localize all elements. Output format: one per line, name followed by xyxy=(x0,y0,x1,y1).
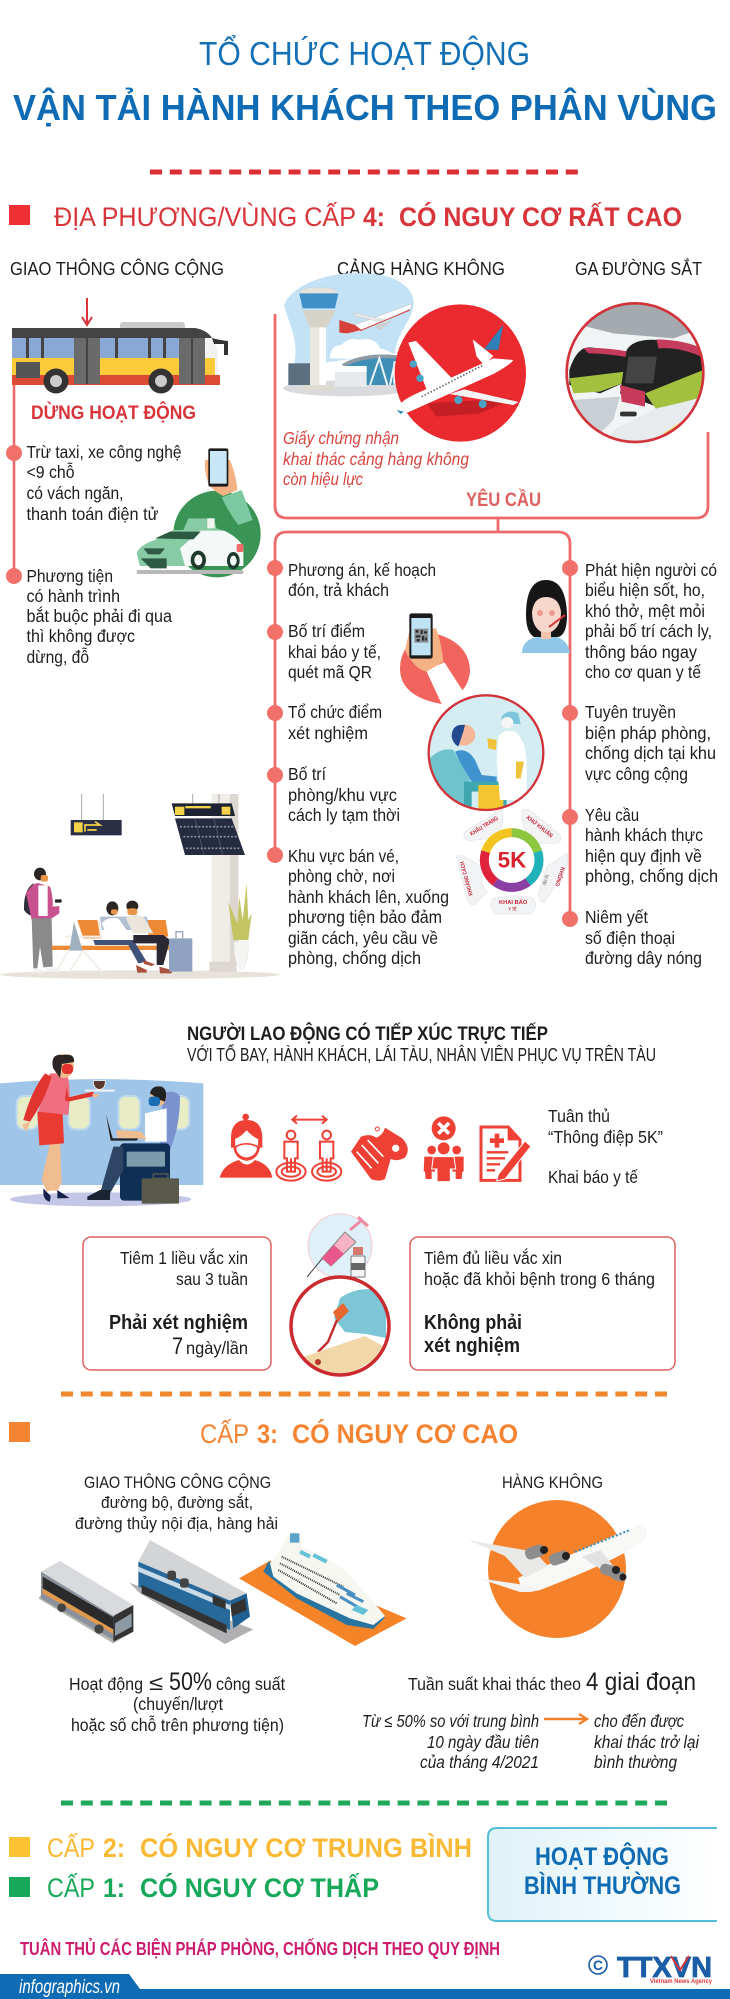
heading: level 2: CÓ NGUY CƠ TRUNG BÌNH xyxy=(140,1832,472,1863)
text: 5K compliance xyxy=(548,1106,663,1187)
text: flight frequency: của tháng 4/2021 xyxy=(420,1752,539,1772)
text: right requirements: Tuyên truyền xyxy=(585,702,676,722)
icon: avoid gatherings xyxy=(424,1116,464,1182)
icon: mask xyxy=(220,1114,272,1178)
text: flight frequency: cho đến được xyxy=(594,1711,684,1731)
timeline: requirements xyxy=(267,518,578,927)
text: left requirements xyxy=(288,560,449,968)
text: exceptions: thanh toán điện tử xyxy=(26,504,159,524)
text: vehicles passing through: bắt buộc phải đi qua xyxy=(26,605,172,626)
text: left requirements: xét nghiệm xyxy=(288,723,368,743)
heading: level 1: 1: xyxy=(103,1873,125,1903)
text: capacity limit: 50% xyxy=(169,1668,212,1696)
panel: partially vaccinated: 7 xyxy=(172,1333,183,1360)
heading: level 2 xyxy=(9,1832,472,1863)
text: left requirements: cách ly tạm thời xyxy=(288,805,400,825)
text: 5K compliance: Khai báo y tế xyxy=(548,1167,638,1187)
text: left requirements: Bố trí điểm xyxy=(288,621,365,641)
logo: TTXVN: C xyxy=(593,1957,603,1973)
heading: level 1: CÓ NGUY CƠ THẤP xyxy=(140,1872,379,1903)
text: airport certificate: Giấy chứng nhận xyxy=(283,428,399,448)
text: left requirements: Bố trí xyxy=(288,764,326,784)
heading: direct-contact workers: NGƯỜI LAO ĐỘNG CÓ TIẾP XÚC TRỰC TIẾP xyxy=(187,1023,548,1045)
panel: partially vaccinated: Phải xét nghiệm xyxy=(109,1312,248,1334)
text: left requirements: đón, trả khách xyxy=(288,580,389,600)
text: aviation level 3: HÀNG KHÔNG xyxy=(502,1473,603,1492)
column headings xyxy=(10,258,702,279)
icon: 5K message: 5K xyxy=(498,848,526,873)
column headings: CẢNG HÀNG KHÔNG xyxy=(337,258,505,279)
icon: metro train circle xyxy=(563,302,707,445)
text: left requirements: phương tiện bảo đảm xyxy=(288,907,442,927)
text: flight frequency: 10 ngày đầu tiên xyxy=(427,1732,539,1752)
text: vehicles passing through: dừng, đỗ xyxy=(26,646,89,667)
text: flight frequency xyxy=(362,1668,700,1772)
text: vehicles passing through: có hành trình xyxy=(26,586,120,606)
heading: level 1 xyxy=(9,1872,379,1903)
text: flight frequency: bình thường xyxy=(594,1752,677,1772)
text: left requirements: Khu vực bán vé, xyxy=(288,846,399,866)
text: 5K compliance: Tuân thủ xyxy=(548,1106,610,1126)
heading: direct-contact workers xyxy=(187,1023,656,1065)
callout: normal operation: BÌNH THƯỜNG xyxy=(524,1870,681,1900)
icon: rapid test xyxy=(291,1277,390,1380)
panel: partially vaccinated: sau 3 tuần xyxy=(176,1269,248,1289)
text: public transport level 3: GIAO THÔNG CÔNG CỘNG xyxy=(84,1473,271,1492)
text: flight frequency: 4 giai đoạn xyxy=(586,1668,696,1696)
icon: 5K message: KHẨU TRANG xyxy=(469,815,500,838)
callout: normal operation: HOẠT ĐỘNG xyxy=(535,1841,669,1871)
icon: keep distance xyxy=(276,1116,341,1181)
column headings: GA ĐƯỜNG SẮT xyxy=(575,258,702,279)
heading: requirements: YÊU CẦU xyxy=(466,489,541,511)
icon: bus xyxy=(12,322,228,394)
icon: covid test circle xyxy=(428,695,543,813)
text: vehicles passing through xyxy=(26,566,172,667)
heading: level 4 xyxy=(9,201,682,232)
icon: 5K message: Y TẾ xyxy=(508,906,517,912)
bracket: airport and rail requirements xyxy=(275,314,708,518)
icon: vaccine syringe xyxy=(307,1214,372,1278)
text: left requirements: Phương án, kế hoạch xyxy=(288,560,436,580)
icon: 5K message: KHỬ KHUẨN xyxy=(525,814,554,839)
panel: fully vaccinated xyxy=(410,1237,675,1370)
heading: level 4: 4: xyxy=(363,202,385,232)
heading: level 3 xyxy=(9,1418,518,1449)
heading: level 4: ĐỊA PHƯƠNG/VÙNG CẤP xyxy=(54,201,356,232)
text: public transport level 3: đường thủy nội địa, hàng hải xyxy=(75,1515,278,1533)
icon: plane on red circle xyxy=(395,304,526,442)
text: capacity limit xyxy=(69,1668,285,1735)
text: vehicles passing through: Phương tiện xyxy=(26,566,113,586)
panel: fully vaccinated: xét nghiệm xyxy=(424,1335,520,1357)
text: flight frequency: khai thác trở lại xyxy=(594,1732,700,1752)
icon: sick woman xyxy=(522,580,570,653)
footer: infographics.vn xyxy=(0,1974,730,1999)
text: left requirements: giãn cách, yêu cầu về xyxy=(288,928,438,948)
text: stop operating: DỪNG HOẠT ĐỘNG xyxy=(31,402,196,424)
heading: level 4: CÓ NGUY CƠ RẤT CAO xyxy=(399,201,682,232)
text: capacity limit: hoặc số chỗ trên phương tiện) xyxy=(71,1714,284,1735)
text: exceptions: có vách ngăn, xyxy=(26,483,124,503)
text: right requirements: số điện thoại xyxy=(585,928,675,948)
text: left requirements: phòng, chống dịch xyxy=(288,948,421,968)
text: left requirements: phòng/khu vực xyxy=(288,785,397,805)
icon: 5K message: TỤ TẬP xyxy=(541,874,550,886)
icon: 5K message: KHOẢNG CÁCH xyxy=(459,861,475,896)
text: airport certificate xyxy=(283,428,469,489)
icon: taxi and phone xyxy=(137,448,261,577)
icon: 5K message xyxy=(456,809,568,914)
text: right requirements: cho cơ quan y tế xyxy=(585,662,701,682)
text: right requirements: thông báo ngay xyxy=(585,642,697,662)
text: capacity limit: ≤ xyxy=(149,1672,163,1695)
logo: TTXVN: Vietnam News Agency xyxy=(650,1978,712,1985)
text: right requirements: biện pháp phòng, xyxy=(585,723,711,743)
heading: level 3: CÓ NGUY CƠ CAO xyxy=(292,1418,518,1449)
text: public transport level 3: đường bộ, đường sắt, xyxy=(101,1493,253,1512)
text: right requirements: khó thở, mệt mỏi xyxy=(585,601,705,621)
icon: health declaration xyxy=(481,1127,531,1181)
heading: level 2: CẤP xyxy=(47,1832,95,1863)
text: capacity limit: (chuyến/lượt xyxy=(133,1694,223,1714)
text: exceptions: <9 chỗ xyxy=(26,461,74,482)
text: right requirements: Phát hiện người có xyxy=(585,560,717,580)
text: exceptions xyxy=(26,442,182,524)
title xyxy=(13,35,717,128)
panel: fully vaccinated: Tiêm đủ liều vắc xin xyxy=(424,1247,562,1268)
heading: level 3: 3: xyxy=(257,1419,278,1449)
column headings: GIAO THÔNG CÔNG CỘNG xyxy=(10,258,224,279)
text: right requirements: chống dịch tại khu xyxy=(585,743,716,763)
text: public transport level 3 xyxy=(75,1473,278,1533)
panel: partially vaccinated: ngày/lần xyxy=(186,1338,248,1358)
callout: normal operation xyxy=(488,1828,717,1921)
text: exceptions: Trừ taxi, xe công nghệ xyxy=(26,442,182,462)
text: flight frequency: Từ ≤ 50% so với trung bình xyxy=(362,1711,539,1731)
text: right requirements: phòng, chống dịch xyxy=(585,866,718,886)
text: right requirements: hiện quy định về xyxy=(585,846,702,866)
icon: 5K message: KHAI BÁO xyxy=(499,899,528,906)
text: compliance reminder: TUÂN THỦ CÁC BIỆN PHÁP PHÒNG, CHỐNG DỊCH THEO QUY ĐỊNH xyxy=(20,1938,500,1959)
arrow: frequency progression xyxy=(544,1714,587,1724)
text: right requirements: vực công cộng xyxy=(585,764,688,784)
timeline: public transport xyxy=(6,380,22,584)
text: capacity limit: Hoạt động xyxy=(69,1674,143,1694)
text: right requirements: Niêm yết xyxy=(585,907,648,927)
icon: hand washing xyxy=(351,1127,408,1181)
text: left requirements: khai báo y tế, xyxy=(288,642,381,662)
text: right requirements: biểu hiện sốt, ho, xyxy=(585,580,705,600)
text: capacity limit: công suất xyxy=(216,1674,285,1694)
text: right requirements: hành khách thực xyxy=(585,825,703,845)
title: TỔ CHỨC HOẠT ĐỘNG xyxy=(199,35,530,72)
text: left requirements: hành khách lên, xuống xyxy=(288,887,449,907)
icon: phone scanning QR xyxy=(400,613,470,704)
illustration: cabin crew and passenger xyxy=(0,1073,203,1206)
heading: level 2: 2: xyxy=(103,1833,125,1863)
text: left requirements: quét mã QR xyxy=(288,662,372,682)
illustration: bus, train, ship xyxy=(38,1532,407,1646)
text: right requirements xyxy=(585,560,718,968)
icon: airport xyxy=(283,273,414,396)
illustration: airport waiting area xyxy=(0,794,280,979)
icon: aviation plane on orange circle xyxy=(468,1500,647,1638)
text: 5K compliance: “Thông điệp 5K” xyxy=(548,1127,663,1147)
head: flight attendant xyxy=(52,1054,74,1078)
footer: infographics.vn: infographics.vn xyxy=(19,1977,120,1998)
title: VẬN TẢI HÀNH KHÁCH THEO PHÂN VÙNG xyxy=(13,86,717,128)
panel: fully vaccinated: Không phải xyxy=(424,1312,522,1334)
text: airport certificate: còn hiệu lực xyxy=(283,469,363,489)
heading: level 1: CẤP xyxy=(47,1872,95,1903)
text: left requirements: Tổ chức điểm xyxy=(288,702,382,722)
icon: 5K message: KHÔNG xyxy=(553,866,567,888)
logo: TTXVN: TTXVN xyxy=(617,1952,712,1984)
arrow: to bus xyxy=(82,298,92,325)
panel: partially vaccinated xyxy=(83,1237,271,1370)
text: right requirements: Yêu cầu xyxy=(585,805,639,825)
text: left requirements: phòng chờ, nơi xyxy=(288,866,395,886)
heading: level 3: CẤP xyxy=(200,1418,249,1449)
text: right requirements: phải bố trí cách ly, xyxy=(585,621,712,641)
text: vehicles passing through: thì không được xyxy=(26,626,135,646)
text: airport certificate: khai thác cảng hàng không xyxy=(283,449,469,469)
text: flight frequency: Tuần suất khai thác theo xyxy=(408,1674,581,1694)
text: right requirements: đường dây nóng xyxy=(585,948,702,968)
panel: partially vaccinated: Tiêm 1 liều vắc xin xyxy=(120,1247,248,1268)
panel: fully vaccinated: hoặc đã khỏi bệnh trong 6 tháng xyxy=(424,1269,655,1289)
